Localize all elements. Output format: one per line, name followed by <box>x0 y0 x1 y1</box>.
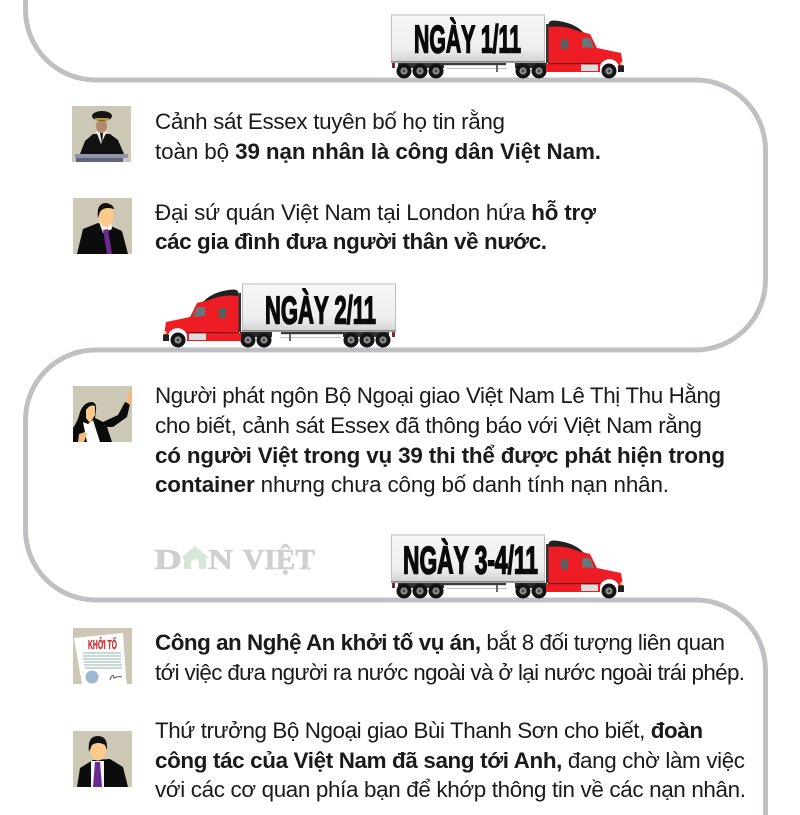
text block: deputy minister Bùi Thanh Sơn <box>155 718 746 802</box>
icon: prosecution document <box>73 628 132 684</box>
text block: foreign ministry spokesperson: container nhưng chưa công bố danh tính nạn nhân. <box>155 472 669 497</box>
text block: deputy minister Bùi Thanh Sơn: công tác của Việt Nam đã sang tới Anh, đang chờ làm việc <box>155 748 745 773</box>
text block: foreign ministry spokesperson: có người Việt trong vụ 39 thi thể được phát hiện trong <box>155 443 725 468</box>
truck: ngày 2/11 <box>163 284 396 348</box>
text block: foreign ministry spokesperson <box>155 383 725 497</box>
text block: embassy: Đại sứ quán Việt Nam tại London hứa hỗ trợ <box>155 200 596 225</box>
truck: ngày 3-4/11 <box>391 535 624 598</box>
text block: Essex police: Cảnh sát Essex tuyên bố họ tin rằng <box>155 109 505 134</box>
text block: Essex police: toàn bộ 39 nạn nhân là công dân Việt Nam. <box>155 139 601 164</box>
icon: spokeswoman raising hand <box>73 386 132 442</box>
text block: Essex police <box>155 109 601 164</box>
watermark: Dân Việt logo: D <box>154 544 182 576</box>
icon: police officer at podium <box>72 106 131 162</box>
text block: embassy: các gia đình đưa người thân về nước. <box>155 229 547 254</box>
text block: deputy minister Bùi Thanh Sơn: Thứ trưởng Bộ Ngoại giao Bùi Thanh Sơn cho biết, đoàn <box>155 718 703 743</box>
text block: foreign ministry spokesperson: cho biết, cảnh sát Essex đã thông báo với Việt Nam rằng <box>155 413 702 438</box>
text block: Nghệ An police: tới việc đưa người ra nước ngoài và ở lại nước ngoài trái phép. <box>155 660 745 685</box>
date label: ngày 3-4/11: NGÀY 3-4/11 <box>403 538 538 582</box>
watermark: Dân Việt logo: VIỆT <box>243 543 315 576</box>
text block: foreign ministry spokesperson: Người phát ngôn Bộ Ngoại giao Việt Nam Lê Thị Thu Hằng <box>155 383 721 408</box>
date label: ngày 2/11: NGÀY 2/11 <box>265 288 376 332</box>
date label: ngày 1/11: NGÀY 1/11 <box>414 18 521 62</box>
icon: deputy minister with purple tie <box>73 731 132 787</box>
truck: ngày 1/11 <box>391 15 624 78</box>
watermark: Dân Việt logo: N <box>208 544 233 576</box>
icon: prosecution document: KHỞI TỐ <box>88 637 117 652</box>
watermark: Dân Việt logo <box>154 543 315 576</box>
text block: Nghệ An police: Công an Nghệ An khởi tố vụ án, bắt 8 đối tượng liên quan <box>155 630 725 655</box>
text block: embassy <box>155 200 596 254</box>
text block: Nghệ An police <box>155 630 745 685</box>
icon: diplomat with purple tie <box>73 198 132 254</box>
text block: deputy minister Bùi Thanh Sơn: với các cơ quan phía bạn để khớp thông tin về các nạn nhân. <box>155 777 746 802</box>
